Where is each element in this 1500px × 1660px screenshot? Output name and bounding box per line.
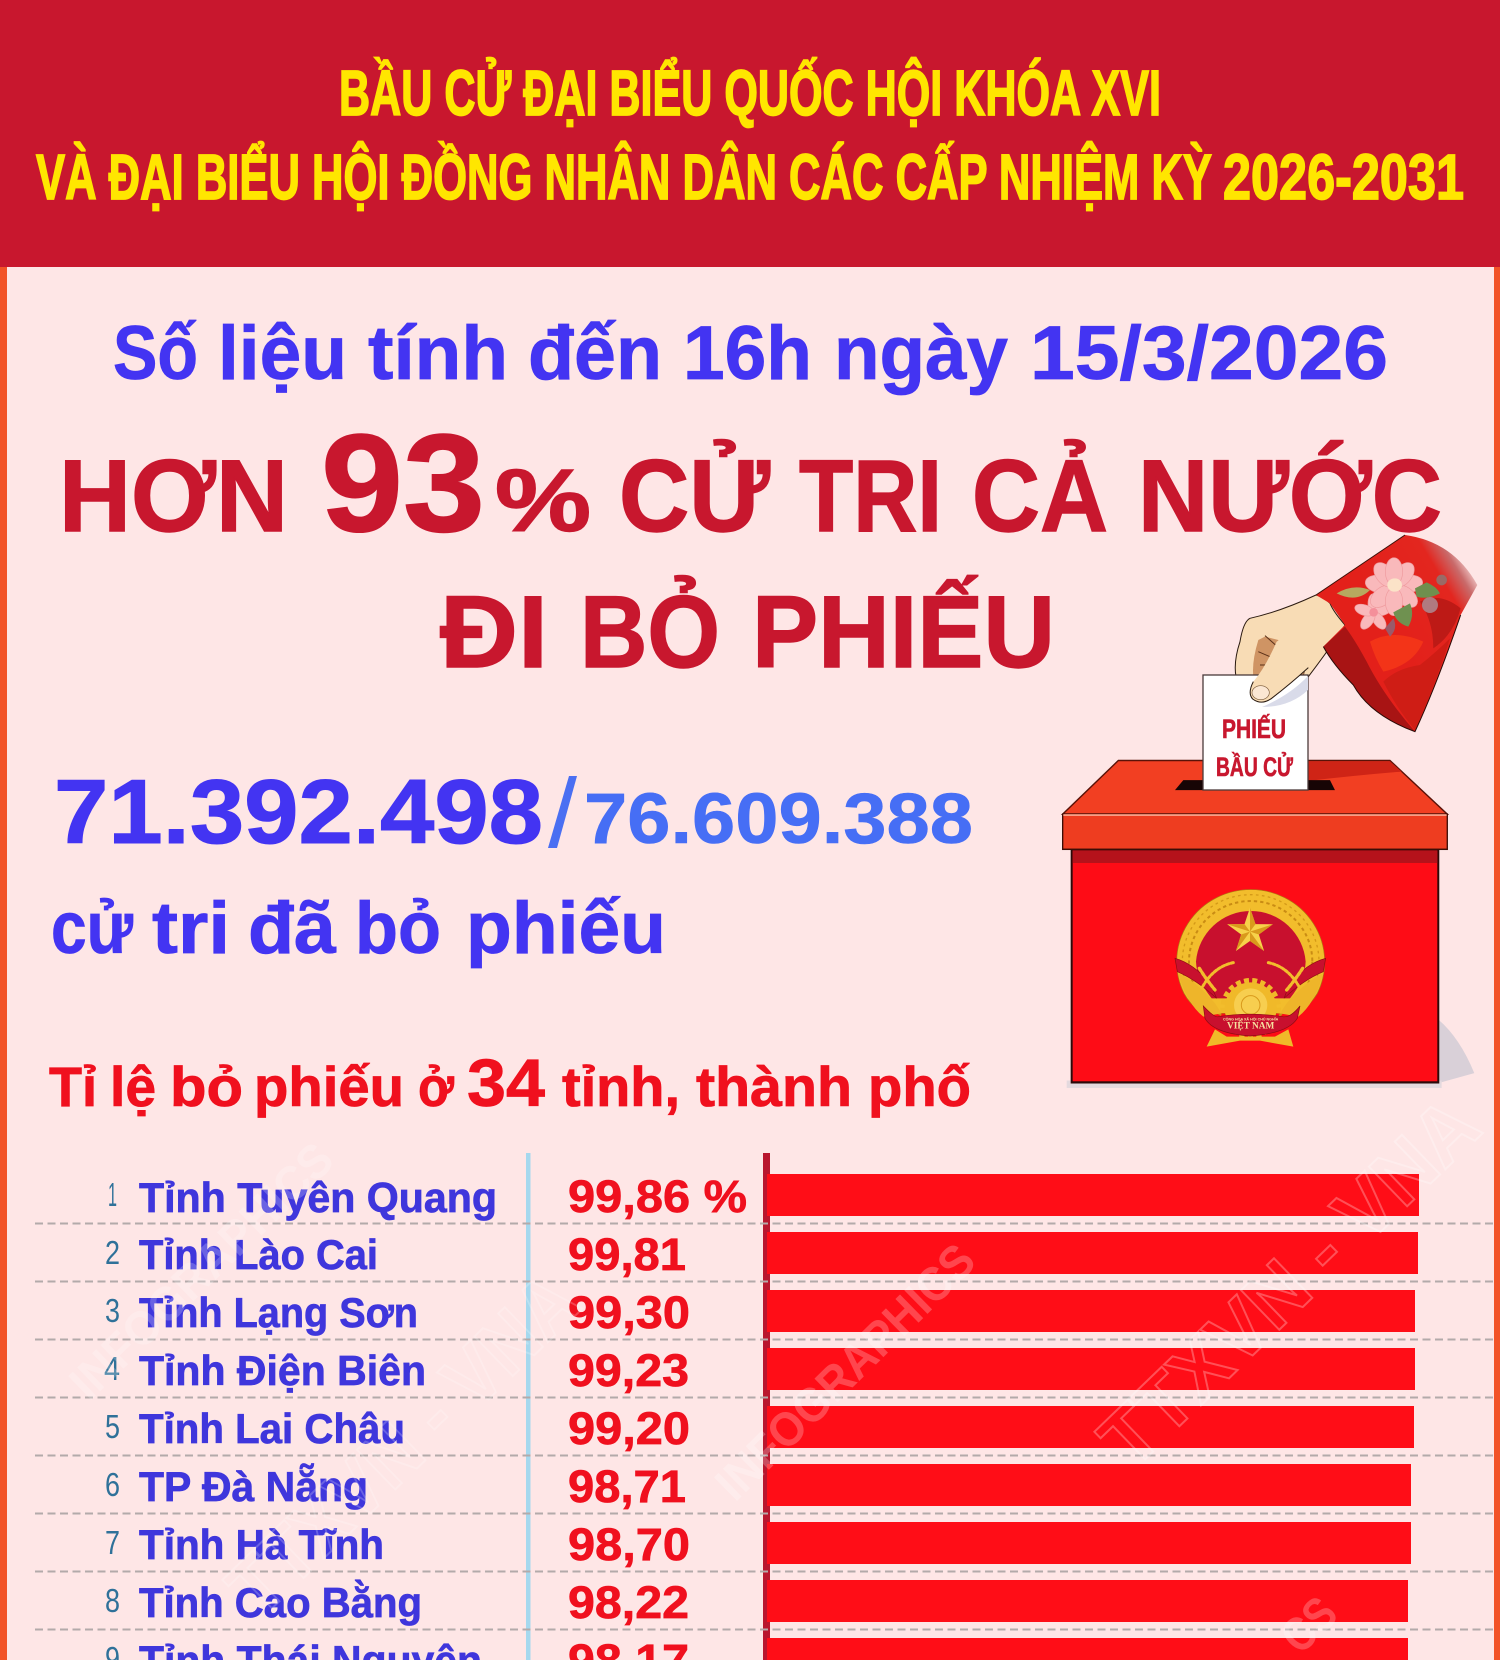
subtitle: data timestamp <box>113 311 1388 396</box>
hand fingers behind ballot <box>1235 595 1345 677</box>
row 3: Tỉnh Lạng Sơn <box>139 1289 418 1336</box>
section heading: turnout in 34 provinces: bỏ <box>170 1055 243 1118</box>
subtitle: data timestamp: 16h <box>683 311 812 396</box>
row 4: 4 <box>104 1350 120 1387</box>
ballot paper: BẦU CỬ <box>1216 750 1293 782</box>
headline: more than 93 percent of voters <box>59 406 1442 689</box>
watermarks: TTXVN - VNA <box>210 1256 596 1632</box>
headline: more than 93 percent of voters: ĐI <box>440 575 548 689</box>
watermarks: TTXVN - VNA <box>1082 1080 1496 1484</box>
subtitle: data timestamp: 15/3/2026 <box>1030 311 1388 396</box>
watermarks <box>60 1080 1496 1660</box>
row 5: 99,20 <box>568 1403 690 1454</box>
statistic: voters who voted over total voters: cử <box>51 888 133 969</box>
section heading: turnout in 34 provinces: Tỉ <box>49 1055 97 1118</box>
section heading: turnout in 34 provinces: phiếu <box>254 1055 404 1118</box>
watermarks: INFOGRAPHICS <box>60 1133 344 1410</box>
ballot paper <box>1203 675 1308 790</box>
headline: more than 93 percent of voters: CỬ <box>619 439 770 553</box>
table: province ranks, names and values <box>104 1171 747 1660</box>
statistic: voters who voted over total voters: bỏ <box>355 888 441 969</box>
subtitle: data timestamp: Số <box>113 311 198 396</box>
subtitle: data timestamp: đến <box>528 311 662 396</box>
row 1: Tỉnh Tuyên Quang <box>139 1174 497 1221</box>
section heading: turnout in 34 provinces: ở <box>418 1055 454 1118</box>
row 1 <box>108 1171 747 1222</box>
row 4: 99,23 <box>568 1345 689 1396</box>
row 8 <box>105 1577 689 1628</box>
row 3 <box>105 1287 690 1338</box>
row 2 <box>105 1229 686 1280</box>
row 3: 99,30 <box>568 1287 690 1338</box>
row 6: 6 <box>105 1466 120 1503</box>
headline: more than 93 percent of voters: 93 <box>321 406 485 561</box>
statistic: voters who voted over total voters: đã <box>248 888 336 969</box>
row 5 <box>105 1403 690 1454</box>
section heading: turnout in 34 provinces <box>49 1046 971 1121</box>
headline: more than 93 percent of voters: HƠN <box>59 439 288 553</box>
headline: more than 93 percent of voters: PHIẾU <box>752 575 1055 689</box>
section heading: turnout in 34 provinces: phố <box>868 1055 971 1118</box>
icon: national emblem: VIỆT NAM <box>1227 1019 1274 1032</box>
row 8: 8 <box>105 1582 120 1619</box>
row 2: 2 <box>105 1234 120 1271</box>
icon: national emblem <box>1175 890 1326 1047</box>
row 4 <box>104 1345 689 1396</box>
section heading: turnout in 34 provinces: lệ <box>110 1055 156 1118</box>
row 1: 1 <box>108 1176 117 1213</box>
section heading: turnout in 34 provinces: 34 <box>467 1046 545 1121</box>
section heading: turnout in 34 provinces: thành <box>696 1055 852 1118</box>
illustration: hand casting ballot into red box <box>1063 535 1477 1088</box>
row 4: Tỉnh Điện Biên <box>139 1347 426 1394</box>
row 6: 98,71 <box>568 1461 686 1512</box>
row 6: TP Đà Nẵng <box>139 1462 368 1510</box>
row 5: Tỉnh Lai Châu <box>139 1405 405 1452</box>
headline: more than 93 percent of voters: BỎ <box>580 575 720 689</box>
subtitle: data timestamp: ngày <box>834 311 1008 396</box>
row 7: 98,70 <box>568 1519 690 1570</box>
headline: more than 93 percent of voters: TRI <box>799 439 942 553</box>
ballot paper: PHIẾU <box>1222 713 1286 744</box>
statistic: voters who voted over total voters: 71.392.498 <box>54 762 543 863</box>
row 2: Tỉnh Lào Cai <box>139 1231 378 1278</box>
row 7: 7 <box>105 1524 120 1561</box>
headline: more than 93 percent of voters: NƯỚC <box>1138 439 1442 553</box>
row 7: Tỉnh Hà Tĩnh <box>139 1521 384 1568</box>
headline: more than 93 percent of voters: % <box>495 451 591 550</box>
hand thumb and sleeve <box>1250 535 1477 732</box>
statistic: voters who voted over total voters: 76.609.388 <box>584 780 973 859</box>
ballot box <box>1063 760 1474 1088</box>
statistic: voters who voted over total voters: phiếu <box>466 888 666 969</box>
section heading: turnout in 34 provinces: tỉnh, <box>562 1055 680 1118</box>
subtitle: data timestamp: liệu <box>218 311 347 396</box>
icon: national emblem: CỘNG HÒA XÃ HỘI CHỦ NGHĨA <box>1223 1016 1279 1021</box>
bar chart: turnout by province <box>767 1174 1419 1660</box>
row 2: 99,81 <box>568 1229 686 1280</box>
row 5: 5 <box>105 1408 120 1445</box>
row 9 <box>105 1635 689 1660</box>
watermarks: INFOGRAPHICS <box>706 1234 986 1511</box>
subtitle: data timestamp: tính <box>368 311 508 396</box>
row 7 <box>105 1519 690 1570</box>
panel: header banner <box>0 0 1500 267</box>
statistic: voters who voted over total voters <box>51 762 973 969</box>
row 8: 98,22 <box>568 1577 689 1628</box>
row 6 <box>105 1461 686 1512</box>
headline: more than 93 percent of voters: CẢ <box>972 439 1108 553</box>
statistic: voters who voted over total voters: tri <box>152 888 230 969</box>
row 1: 99,86 % <box>568 1171 747 1222</box>
row 3: 3 <box>105 1292 120 1329</box>
row 8: Tỉnh Cao Bằng <box>139 1578 422 1626</box>
